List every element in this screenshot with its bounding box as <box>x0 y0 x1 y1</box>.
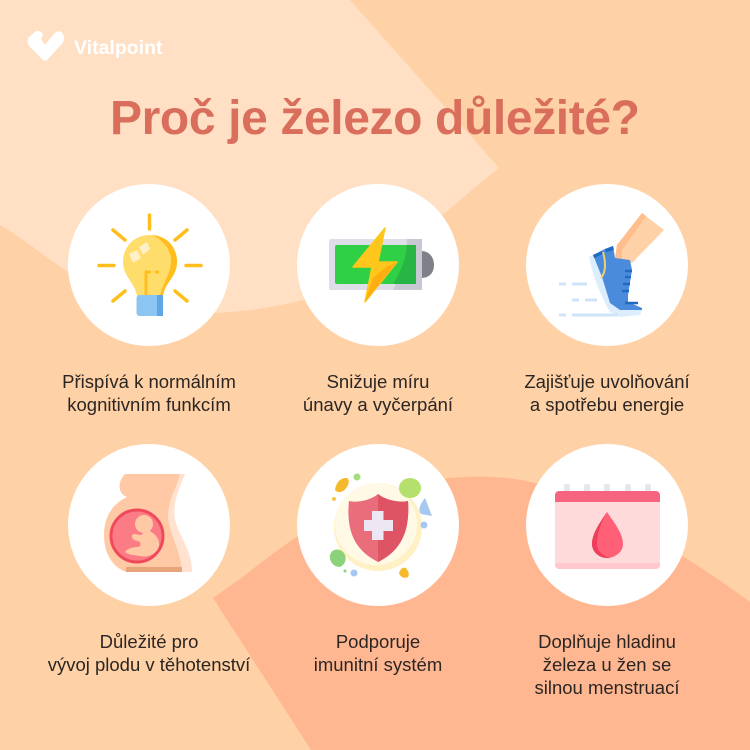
caption: únavy a vyčerpání <box>303 394 454 415</box>
panel: pregnancy <box>48 444 251 675</box>
caption: Zajišťuje uvolňování <box>524 371 691 392</box>
background light shape <box>0 0 499 313</box>
caption: železa u žen se <box>543 654 671 675</box>
caption: imunitní systém <box>314 654 442 675</box>
caption: Podporuje <box>336 631 420 652</box>
panel: immunity <box>297 444 459 675</box>
caption: Doplňuje hladinu <box>538 631 676 652</box>
logo: Vitalpoint <box>28 31 163 61</box>
icon: calendar with blood drop <box>555 484 660 569</box>
caption: Přispívá k normálním <box>62 371 236 392</box>
icon: shield with germs <box>330 474 432 578</box>
caption: silnou menstruací <box>535 677 680 698</box>
caption: kognitivním funkcím <box>67 394 231 415</box>
icon: pregnant belly <box>104 474 192 572</box>
panel: fatigue <box>297 184 459 415</box>
title: Proč je železo důležité? <box>110 92 640 145</box>
panel: menstruation <box>526 444 688 698</box>
icon: battery <box>329 228 434 302</box>
caption: Důležité pro <box>100 631 198 652</box>
icon: light bulb <box>99 215 201 316</box>
panel: cognitive functions <box>62 184 236 415</box>
panel: energy <box>524 184 691 415</box>
background dark shape <box>213 477 750 750</box>
caption: vývoj plodu v těhotenství <box>48 654 251 675</box>
icon: running shoe <box>559 213 664 317</box>
caption: a spotřebu energie <box>530 394 684 415</box>
caption: Snižuje míru <box>327 371 429 392</box>
logo: Vitalpoint: Vitalpoint <box>74 37 163 59</box>
